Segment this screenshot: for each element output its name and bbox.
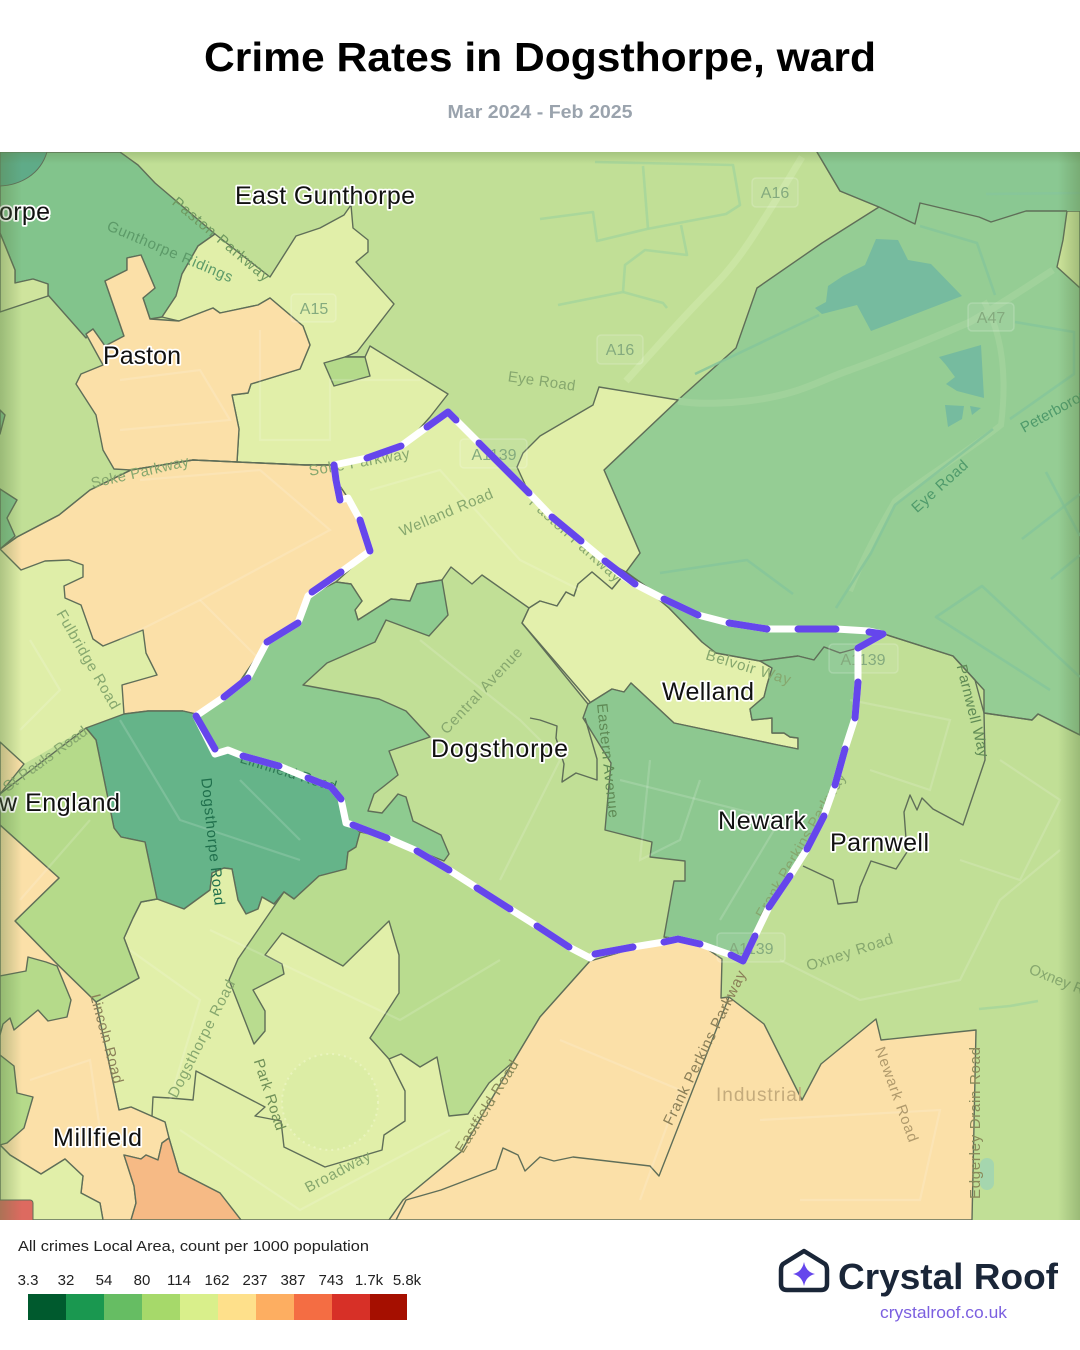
drains (540, 162, 1080, 1009)
road labels (0, 194, 1080, 1199)
region: New England green (0, 728, 157, 1002)
region: Newark green (583, 647, 858, 961)
road labels: Central Avenue (437, 644, 526, 738)
boundary: ward centre line (522, 608, 590, 702)
ward boundary: Dogsthorpe (196, 412, 883, 961)
road labels: Edgerley Drain Road (967, 1047, 984, 1199)
legend scale labels: 387 (280, 1272, 306, 1289)
region: Newark green strip along ward (626, 572, 884, 661)
legend scale labels: 162 (204, 1272, 230, 1289)
region: south-west yellow (96, 868, 540, 1220)
legend scale labels: 3.3 (18, 1272, 38, 1289)
place names: Welland (662, 678, 754, 706)
place names: Newark (718, 807, 806, 835)
legend scale labels: 114 (167, 1272, 191, 1289)
road badge A1139 south: A1139 (728, 941, 774, 958)
place names: orpe (0, 198, 50, 226)
region: Dogsthorpe south-west darkest (86, 711, 360, 914)
road badge A16 south: A16 (606, 342, 634, 359)
legend title: All crimes Local Area, count per 1000 population (18, 1239, 369, 1255)
road labels: Lincoln Road (86, 992, 126, 1085)
road badge A1139 north: A1139 (471, 447, 517, 464)
local streets (20, 330, 1060, 1210)
road labels: Eastern Avenue (593, 702, 622, 819)
road badge A47 (968, 303, 1014, 331)
road badge A1139 east: A1139 (840, 652, 886, 669)
road labels: St Pauls Road (0, 723, 91, 796)
region: Dogsthorpe north green (196, 580, 449, 861)
road badge A1139 north (460, 439, 527, 468)
road badge A16 north: A16 (761, 185, 789, 202)
road labels: Dogsthorpe Road (197, 777, 228, 906)
road labels: Soke Parkway (308, 445, 411, 480)
region: Welland north yellow inside ward (334, 412, 626, 620)
road labels: Soke Parkway (89, 453, 191, 492)
road labels: Industrial (716, 1085, 802, 1106)
title: Crime Rates in Dogsthorpe, ward (204, 34, 876, 80)
region: Paston peach (76, 255, 310, 470)
region: Millfield orange (124, 1138, 241, 1220)
place names: East Gunthorpe (235, 182, 415, 210)
region: north-east corner (1057, 211, 1080, 288)
map edge shading (0, 152, 1080, 1220)
legend scale labels (18, 1272, 422, 1289)
road badge A1139 south (717, 933, 785, 962)
region: Welland north-east yellow outside ward (517, 387, 678, 572)
brand url: crystalroof.co.uk (880, 1304, 1008, 1322)
legend scale labels: 1.7k (355, 1272, 384, 1289)
region: central south green (229, 832, 590, 1116)
road badge A16 north (752, 178, 798, 207)
pond: south-east (980, 1158, 994, 1190)
road labels: Gunthorpe Ridings (104, 218, 235, 286)
legend scale labels: 80 (134, 1272, 150, 1289)
road badge A15: A15 (300, 301, 328, 318)
map: crime rate choropleth (0, 152, 1080, 1230)
boundary lines in south-west (152, 1059, 405, 1167)
subtitle: date range: Mar 2024 - Feb 2025 (448, 101, 632, 122)
park circle (282, 1054, 378, 1150)
road labels: Dogsthorpe Road (165, 977, 239, 1101)
road labels: Newark Road (871, 1045, 921, 1144)
region: north-east low crime area (604, 152, 1080, 735)
region: west green patches (0, 957, 71, 1035)
icon: Crystal Roof house logo (781, 1251, 827, 1290)
legend scale labels: 32 (58, 1272, 74, 1289)
road labels: Oxney Road (804, 931, 895, 975)
region: left small teal wedges (0, 489, 17, 549)
region: north-east top band (817, 152, 1080, 224)
road labels: Broadway (302, 1147, 374, 1196)
region: small green patch north of ward (324, 357, 370, 386)
region: south-east peach (389, 939, 976, 1220)
ward outline white (196, 412, 883, 961)
region: west yellow strip (0, 537, 157, 764)
brand name: Crystal Roof (838, 1256, 1059, 1297)
region: top-left teal corner (0, 152, 47, 186)
legend scale labels: 743 (318, 1272, 344, 1289)
road labels: Linnfield Road (238, 750, 339, 795)
place names: Paston (103, 342, 181, 370)
place names: Dogsthorpe (431, 735, 568, 763)
legend scale labels: 54 (96, 1272, 112, 1289)
road labels: Paston Parkway (169, 194, 273, 286)
place names (0, 182, 929, 1152)
road labels: Eye Road (908, 457, 972, 516)
road labels: Frank Perkins Parkway (752, 770, 850, 921)
legend scale labels: 237 (242, 1272, 268, 1289)
legend colour bar (28, 1294, 407, 1320)
road labels: Frank Perkins Parkway (660, 967, 750, 1128)
main roads north-east (626, 157, 1053, 591)
road labels: Welland Road (397, 485, 496, 540)
region: north Gunthorpe yellow (162, 205, 448, 465)
road labels: Fulbridge Road (53, 607, 123, 712)
road labels: Eye Road (507, 368, 576, 395)
region: Gunthorpe top left (0, 152, 215, 346)
legend scale labels: 5.8k (393, 1272, 422, 1289)
boundary: Parnwell (803, 634, 985, 904)
place names: Parnwell (830, 829, 929, 857)
road badge A15 (291, 294, 336, 322)
road badge A1139 east (829, 644, 898, 673)
road badge A16 south (597, 335, 643, 364)
place names: Millfield (53, 1124, 142, 1152)
road badge A47: A47 (977, 310, 1005, 327)
region: bottom-left yellow (0, 1145, 103, 1220)
region: west peach (0, 742, 24, 794)
region: Welland south yellow (522, 572, 798, 749)
road labels: Park Road (250, 1057, 289, 1132)
road labels: Paston Parkway (525, 494, 625, 586)
road labels: Eastfield Road (452, 1057, 522, 1156)
ward outline purple dashes (196, 412, 883, 961)
place names: w England (0, 789, 120, 817)
lakes (815, 239, 984, 427)
region: central west peach (0, 460, 370, 714)
road labels: Parnwell Way (953, 663, 992, 760)
region: bottom-left red (0, 1200, 34, 1220)
road labels: Belvoir Way (704, 647, 793, 689)
